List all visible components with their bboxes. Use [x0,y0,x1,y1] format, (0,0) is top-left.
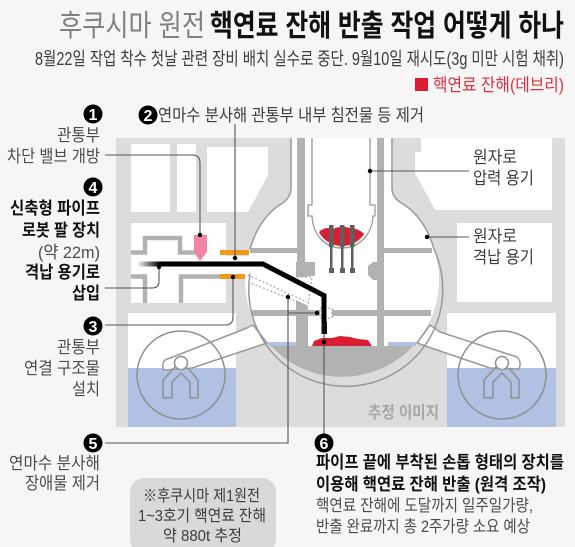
step 4: robot arm insertion [10,178,102,303]
leader dots [157,169,429,344]
building background [116,138,565,427]
title: 후쿠시마 원전 [59,10,205,43]
step 4: robot arm insertion: 신축형 파이프 [10,199,100,218]
note box: estimated debris amount: ※후쿠시마 제1원전 [143,487,260,505]
fuel debris on pedestal floor [312,336,372,346]
title [59,10,564,43]
step 2: sediment removal: 연마수 분사해 관통부 내부 침전물 등 제거 [158,106,424,125]
reactor cross-section diagram [116,138,565,427]
step 4: robot arm insertion: (약 22m) [38,243,100,262]
step 4: robot arm insertion: 4 [89,180,98,197]
step 6: debris retrieval: 핵연료 잔해에 도달까지 일주일가량, [316,496,533,515]
step 5: obstacle removal: 장애물 제거 [25,474,100,493]
concrete walls inside vessel [250,138,432,346]
label: reactor pressure vessel [473,148,534,188]
building rooms [128,138,556,368]
gripper [322,322,327,334]
control rods [329,225,355,273]
step 5: obstacle removal [9,434,102,493]
containment vessel outline [249,138,443,386]
vent pipes [163,325,520,370]
step 1: valve opening: 차단 밸브 개방 [7,147,100,166]
left piping around penetration [131,238,222,303]
step 4: robot arm insertion: 로봇 팔 장치 [22,221,100,240]
label: reactor pressure vessel: 원자로 [473,148,517,167]
image estimate note: 추정 이미지 [368,403,439,422]
label: containment vessel: 격납 용기 [473,248,534,267]
torus right [458,331,546,419]
penetration passage [226,256,258,274]
step 3: connection structure: 3 [89,319,98,336]
fuel debris in pressure vessel [319,227,364,246]
step 6: debris retrieval: 반출 완료까지 총 2주가량 소요 예상 [316,517,530,536]
reactor pressure vessel [308,138,375,273]
note box: estimated debris amount: 1~3호기 핵연료 잔해 [138,507,266,525]
removed obstacle area dashed outline [248,275,332,318]
step 5: obstacle removal: 5 [89,436,98,453]
orange penetration seals [220,250,249,279]
note box: estimated debris amount: 약 880t 추정 [163,527,242,545]
pedestal floor [271,346,413,377]
label: containment vessel [473,227,534,267]
leader lines [105,124,469,443]
torus left [137,331,225,419]
step 1: valve opening: 관통부 [57,126,100,145]
note box: estimated debris amount [130,478,276,547]
step 3: connection structure: 연결 구조물 [24,359,100,378]
legend: fuel debris: 핵연료 잔해(데브리) [433,75,564,95]
step 1: valve opening [7,104,102,166]
water pools [128,368,556,427]
label: reactor pressure vessel: 압력 용기 [473,169,534,188]
step 3: connection structure: 관통부 [57,338,100,357]
step 6: debris retrieval: 6 [320,436,329,453]
water inside vessel [268,342,416,346]
step 3: connection structure [24,316,102,399]
step 4: robot arm insertion: 격납 용기로 [25,263,100,282]
label: containment vessel: 원자로 [473,227,517,246]
step 5: obstacle removal: 연마수 분사해 [9,454,100,473]
step 1: valve opening: 1 [89,107,98,124]
step 3: connection structure: 설치 [72,380,100,399]
step 6: debris retrieval [314,434,564,536]
robot arm [137,262,327,334]
containment vessel [245,138,439,377]
step 6: debris retrieval: 이용해 핵연료 잔해 반출 (원격 조작) [316,475,546,494]
step 2: sediment removal: 2 [144,108,153,125]
pink valve [194,235,207,261]
step 4: robot arm insertion: 삽입 [72,284,100,303]
